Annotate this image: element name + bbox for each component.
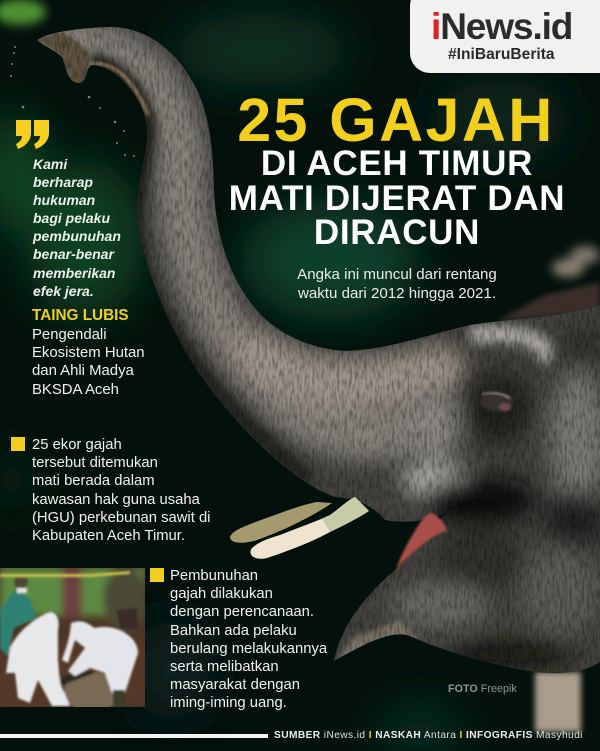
subtitle note: Angka ini muncul dari rentang: [297, 266, 497, 283]
title: subtitle: DIRACUN: [314, 213, 480, 252]
bullet marker 2: [150, 568, 164, 582]
quote text: bagi pelaku: [33, 210, 110, 226]
quote text: [32, 156, 121, 299]
footer bar: [0, 734, 268, 738]
logo panel: [410, 0, 600, 73]
quote author role: Pengendali: [32, 327, 107, 343]
carcass: [62, 671, 114, 707]
quote text: Kami: [33, 156, 67, 172]
quote text: efek jera.: [33, 283, 94, 299]
subtitle note: [297, 266, 497, 302]
quote author role: dan Ahli Madya: [32, 363, 134, 379]
quote text: pembunuhan: [33, 228, 121, 244]
bullet text 1: mati berada dalam: [32, 473, 155, 489]
white suit worker left: [6, 612, 70, 706]
title: number: 25 GAJAH: [237, 86, 555, 154]
water droplets: [10, 46, 135, 157]
white suit worker right: [62, 621, 138, 693]
quote author role: Ekosistem Hutan: [32, 345, 145, 361]
quote text: benar-benar: [33, 246, 114, 262]
subtitle note: waktu dari 2012 hingga 2021.: [298, 284, 496, 302]
quote author role: [32, 327, 145, 398]
bullet text 2: iming-iming uang.: [170, 695, 287, 711]
bullet text 1: (HGU) perkebunan sawit di: [32, 510, 210, 526]
title: subtitle: [229, 144, 565, 252]
bullet text 1: kawasan hak guna usaha: [32, 492, 200, 508]
photo credit: FOTO Freepik: [448, 683, 517, 695]
footer credits: SUMBER iNews.id I NASKAH Antara I INFOGRAFIS Masyhudi: [274, 730, 583, 741]
bullet text 2: serta melibatkan: [170, 659, 279, 675]
bullet text 2: Bahkan ada pelaku: [170, 623, 297, 639]
title: subtitle: DI ACEH TIMUR: [261, 144, 533, 183]
bullet text 1: 25 ekor gajah: [32, 437, 122, 453]
mouth: [396, 513, 447, 569]
title: subtitle: MATI DIJERAT DAN: [229, 179, 565, 218]
bullet text 2: berulang melakukannya: [170, 641, 327, 657]
hashtag: #IniBaruBerita: [448, 46, 555, 63]
bullet text 2: dengan perencanaan.: [170, 604, 314, 620]
bullet text 1: Kabupaten Aceh Timur.: [32, 528, 185, 544]
tusks: [230, 497, 369, 559]
bullet marker 1: [11, 437, 25, 451]
eye: [481, 393, 513, 411]
bullet text 1: [32, 437, 210, 544]
quote text: hukuman: [33, 192, 95, 208]
quote mark icon: [16, 120, 49, 149]
green suit worker: [0, 590, 36, 656]
logo: iNews.id: iNews.id: [431, 6, 572, 47]
quote text: berharap: [33, 174, 93, 190]
quote author name: TAING LUBIS: [32, 307, 129, 324]
bullet text 2: Pembunuhan: [170, 568, 258, 584]
bullet text 2: masyarakat dengan: [170, 677, 300, 693]
bullet text 2: gajah dilakukan: [170, 586, 273, 602]
quote author role: BKSDA Aceh: [32, 382, 119, 398]
bullet text 2: [170, 568, 328, 711]
bullet text 1: tersebut ditemukan: [32, 455, 158, 471]
field photo: officers in protective suits with elephant carcass: [0, 568, 145, 707]
quote text: memberikan: [33, 265, 115, 281]
